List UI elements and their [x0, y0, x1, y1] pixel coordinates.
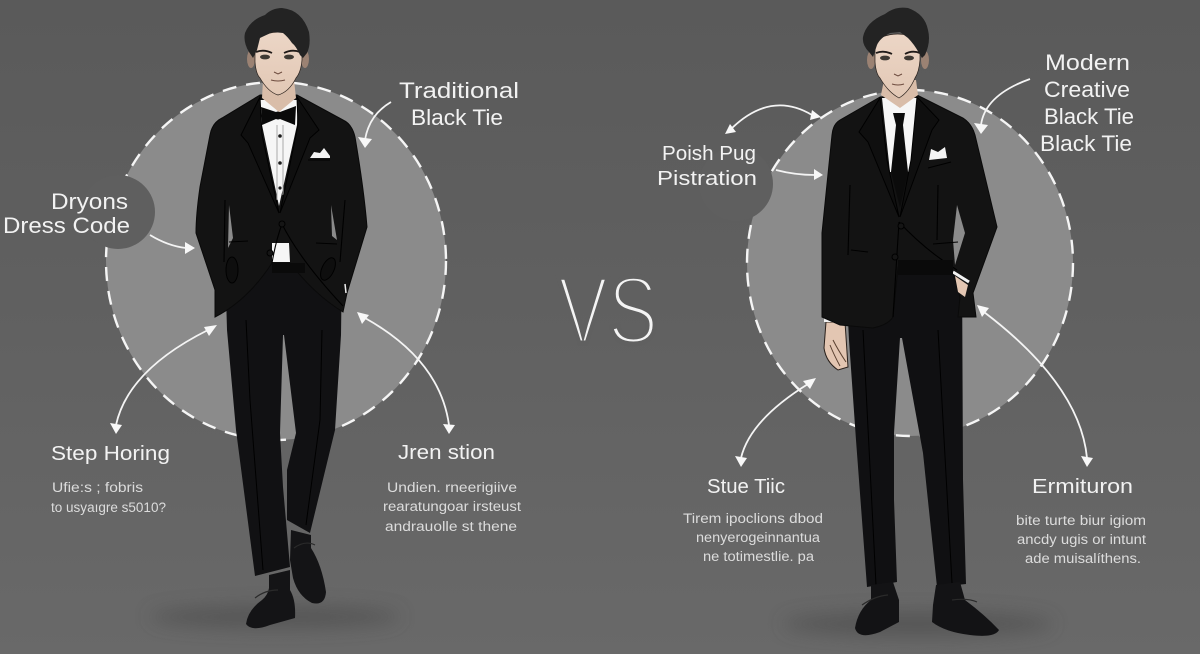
- necktie: [891, 113, 908, 208]
- neck and ears: [247, 50, 309, 112]
- heading: traditional black tie: [399, 78, 519, 130]
- text block: jren stion: [383, 441, 521, 534]
- heading: modern creative black tie: Modern: [1045, 50, 1130, 75]
- text block: ermituron: Ermituron: [1032, 475, 1133, 498]
- text block: jren stion: rearatungoar irsteust: [383, 499, 521, 514]
- shirt: [882, 98, 917, 172]
- heading: modern creative black tie: Black Tie: [1040, 131, 1132, 156]
- arrow: poish pug to collar: [725, 105, 821, 134]
- text block: step horing: Ufie:s ; fobris: [52, 480, 143, 495]
- arrow: dress code to jacket: [150, 235, 195, 254]
- arrow: modern heading to jacket: [974, 79, 1030, 134]
- panel: modern circle backdrop: [699, 90, 1073, 436]
- shoe laces: [255, 543, 315, 598]
- hand: [824, 322, 848, 370]
- text block: ermituron: bite turte biur igiom: [1016, 513, 1146, 528]
- heading: traditional black tie: Traditional: [399, 78, 519, 103]
- pocket square: [929, 147, 947, 160]
- arrow: step horing to trousers: [110, 325, 217, 434]
- arrow: jren stion to trousers: [357, 312, 455, 434]
- jacket: [196, 95, 367, 317]
- heading: modern creative black tie: Black Tie: [1044, 104, 1134, 129]
- shirt cuff: [824, 315, 839, 322]
- arrow: pistration to sleeve: [776, 169, 823, 180]
- text block: jren stion: Jren stion: [398, 441, 495, 464]
- text block: jren stion: Undien. rneerigiive: [387, 480, 517, 495]
- shirt placket: [277, 125, 283, 200]
- arrow: stue tiic to trousers: [735, 378, 816, 467]
- label: poish pug pistration: [657, 142, 757, 190]
- heading: dress code: Dryons: [51, 189, 128, 214]
- left shoe: [855, 582, 899, 635]
- heading: dress code: Dress Code: [3, 213, 130, 238]
- shoe laces: [862, 595, 977, 605]
- jacket: [822, 95, 997, 328]
- finger lines: [830, 340, 846, 366]
- text block: step horing: Step Horing: [51, 442, 170, 465]
- floor shadow: modern figure: [783, 612, 1053, 636]
- text block: stue tiic: Tirem ipoclions dbod: [683, 511, 823, 526]
- arm gap and hand in pocket: [953, 205, 969, 297]
- face: [875, 34, 920, 98]
- panel: traditional circle backdrop: [81, 82, 446, 440]
- text block: step horing: [51, 442, 170, 515]
- face: [255, 32, 302, 95]
- text block: ermituron: ancdy ugis or intunt: [1017, 532, 1146, 547]
- text block: ermituron: [1016, 475, 1146, 566]
- vs label: VS: [558, 257, 658, 364]
- text block: ermituron: ade muisalíthens.: [1025, 551, 1141, 566]
- figure: traditional black tie man: [196, 8, 367, 628]
- heading: modern creative black tie: Creative: [1044, 77, 1130, 102]
- right shoe: [932, 582, 999, 636]
- figure: modern black tie man: [822, 8, 999, 636]
- trousers: [845, 260, 966, 587]
- bow tie: [261, 106, 296, 125]
- left shoe: [246, 570, 295, 628]
- text block: step horing: to usyaıgre s5010?: [51, 500, 166, 515]
- lapels: [859, 97, 939, 217]
- text block: stue tiic: Stue Tiic: [707, 475, 785, 498]
- heading: modern creative black tie: [1040, 50, 1134, 156]
- text block: jren stion: andrauolle st thene: [385, 519, 517, 534]
- label: poish pug pistration: Pistration: [657, 167, 757, 190]
- arrow: traditional heading to jacket: [358, 102, 391, 148]
- floor shadow: traditional figure: [150, 606, 400, 628]
- jacket details: [848, 162, 958, 317]
- trousers: [225, 260, 342, 576]
- jacket details: [224, 160, 346, 306]
- heading: traditional black tie: Black Tie: [411, 105, 503, 130]
- shirt studs: [278, 134, 282, 190]
- neck and ears: [867, 51, 929, 108]
- arm slits: [228, 205, 337, 248]
- heading: dress code: [3, 189, 130, 238]
- arrow: ermituron to trousers: [977, 305, 1093, 467]
- text block: stue tiic: [683, 475, 823, 564]
- lapels: [241, 97, 319, 213]
- shirt front: [260, 100, 298, 262]
- text block: stue tiic: ne totimestlie. pa: [703, 549, 815, 564]
- label: poish pug pistration: Poish Pug: [662, 142, 756, 165]
- hair: [863, 8, 929, 58]
- right shoe: [290, 530, 326, 604]
- pocket square: [310, 148, 330, 158]
- hair: [244, 8, 310, 58]
- text block: stue tiic: nenyerogeinnantua: [696, 530, 821, 545]
